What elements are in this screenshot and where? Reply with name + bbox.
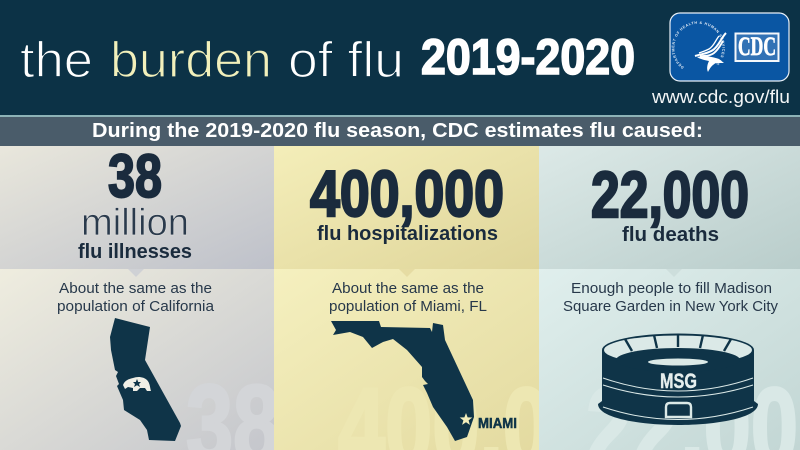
panel background deaths — [539, 146, 800, 450]
icon: Miami star — [460, 413, 472, 425]
stat: 38 million flu illnesses: flu illnesses — [78, 241, 192, 263]
comparison text Madison Square Garden — [563, 280, 778, 315]
icon: California map — [110, 318, 181, 441]
stat: 400,000 flu hospitalizations: flu hospitalizations — [317, 223, 498, 245]
panel: flu hospitalizations — [274, 146, 539, 450]
panel: flu illnesses — [0, 142, 274, 450]
comparison text Miami: population of Miami, FL — [329, 298, 487, 315]
comparison text Madison Square Garden: Square Garden in New York City — [563, 298, 778, 315]
title: burden — [110, 32, 272, 88]
icon: Madison Square Garden stadium: MSG — [660, 370, 697, 393]
title — [20, 29, 635, 88]
comparison text Miami: About the same as the — [332, 280, 484, 297]
stat: 22,000 flu deaths: 22,000 — [591, 158, 749, 231]
website URL: www.cdc.gov/flu — [651, 87, 790, 107]
title: the — [20, 32, 93, 88]
icon: HHS seal — [672, 21, 727, 72]
Miami label: MIAMI — [478, 415, 517, 432]
stat: 400,000 flu hospitalizations: 400,000 — [310, 157, 504, 230]
comparison text Madison Square Garden: Enough people to fill Madison — [571, 280, 772, 297]
stat: 22,000 flu deaths: flu deaths — [622, 224, 719, 246]
comparison text Miami — [329, 280, 487, 315]
panel background illnesses — [0, 146, 274, 450]
comparison text California: About the same as the — [59, 280, 212, 297]
comparison text California — [57, 280, 215, 315]
panel: flu deaths — [539, 146, 800, 450]
stat: 22,000 flu deaths — [591, 158, 749, 246]
subtitle band — [0, 115, 800, 146]
CDC HHS logo — [669, 12, 790, 82]
header banner — [0, 0, 800, 115]
stat: 38 million flu illnesses — [78, 142, 192, 263]
panel background hospitalizations — [274, 146, 539, 450]
icon: Madison Square Garden stadium — [598, 334, 758, 425]
CDC wordmark — [736, 32, 778, 61]
icon: California bear — [123, 377, 151, 391]
stat: 38 million flu illnesses: million — [81, 202, 189, 244]
comparison text California: population of California — [57, 298, 215, 315]
title: 2019-2020 — [421, 29, 635, 85]
CDC wordmark: CDC — [738, 32, 776, 61]
subtitle band: During the 2019-2020 flu season, CDC estimates flu caused: — [92, 120, 703, 142]
stat: 38 million flu illnesses: 38 — [108, 142, 162, 210]
title: of flu — [288, 32, 404, 88]
icon: Florida map — [331, 321, 474, 441]
